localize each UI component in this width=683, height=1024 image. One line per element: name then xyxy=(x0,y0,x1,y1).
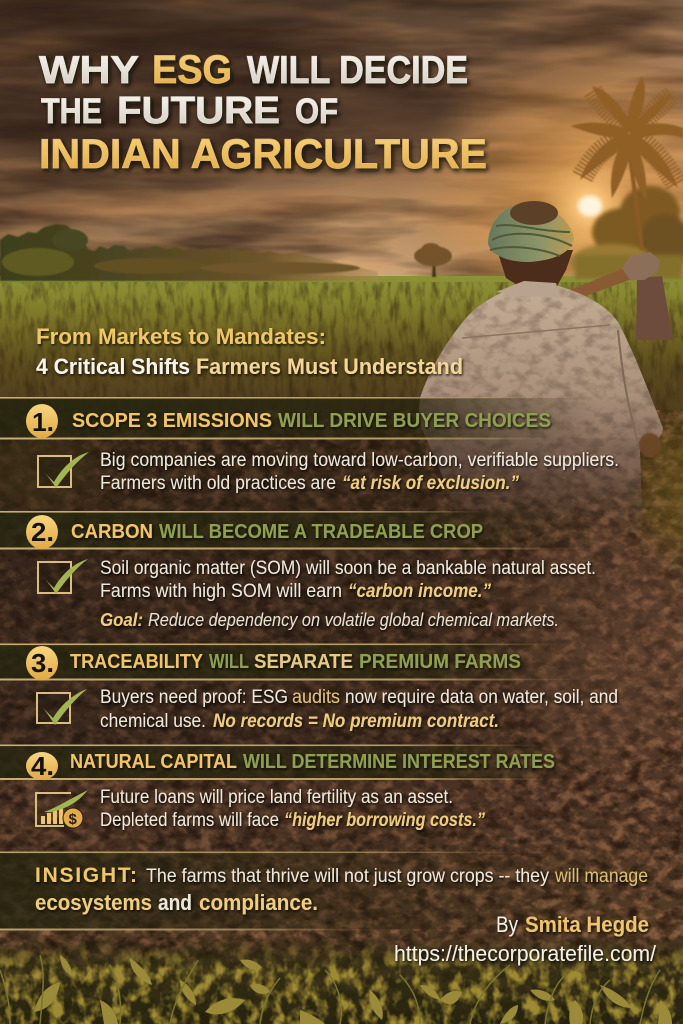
body text 4 xyxy=(100,787,485,831)
body text 1: Farmers with old practices are xyxy=(100,473,336,494)
title: THE xyxy=(41,92,102,131)
hoe handle xyxy=(560,264,640,304)
badge 3: 3. xyxy=(31,648,54,678)
heading 1: WILL DRIVE BUYER CHOICES xyxy=(278,409,551,432)
body text 4: Future loans will price land fertility as an asset. xyxy=(100,787,453,808)
icon: finance chart with leaf and coin: $ xyxy=(68,811,78,828)
title: OF xyxy=(295,92,338,131)
section 4 background xyxy=(0,780,683,852)
section 1 panel xyxy=(0,397,683,512)
heading 3: TRACEABILITY xyxy=(70,650,203,673)
palm tree xyxy=(570,76,683,250)
insight text: compliance. xyxy=(199,890,318,915)
section 3 panel xyxy=(0,644,683,745)
turban xyxy=(488,203,574,262)
title: ESG xyxy=(152,48,232,92)
body text 1 xyxy=(100,450,619,494)
insight text: The farms that thrive will not just grow crops -- they xyxy=(146,866,549,887)
sun glow xyxy=(578,196,602,216)
lone tree xyxy=(414,243,452,277)
icon: checkbox 2 xyxy=(38,559,88,594)
heading 3: SEPARATE xyxy=(254,650,353,673)
shirt texture xyxy=(427,287,661,542)
body text 3 xyxy=(100,687,618,732)
badge 4: 4. xyxy=(31,751,54,781)
heading 1 xyxy=(72,409,551,432)
title: INDIAN AGRICULTURE xyxy=(39,130,487,177)
hand on hoe xyxy=(622,252,660,280)
subheading: Farmers Must Understand xyxy=(196,354,463,379)
heading 4: NATURAL CAPITAL xyxy=(70,750,237,773)
byline and url: https://thecorporatefile.com/ xyxy=(394,941,657,966)
insight panel xyxy=(0,852,683,930)
body text 3: chemical use. xyxy=(100,711,206,732)
body text 2: Soil organic matter (SOM) will soon be a bankable natural asset. xyxy=(100,558,596,579)
badge 3 xyxy=(26,646,58,680)
section 2 background xyxy=(0,549,683,644)
body text 3: audits xyxy=(292,687,340,708)
body text 2: Farms with high SOM will earn xyxy=(100,581,342,602)
body text 3: Buyers need proof: ESG xyxy=(100,687,288,708)
section 3 background xyxy=(0,680,683,745)
body text 2: “carbon income.” xyxy=(348,581,491,602)
background: field and soil xyxy=(0,276,683,1024)
title: FUTURE xyxy=(117,90,280,132)
badge 4 xyxy=(26,751,58,781)
icon: checkbox 1 xyxy=(38,452,89,488)
insight text: INSIGHT: xyxy=(35,864,137,887)
subheading: 4 Critical Shifts xyxy=(36,354,190,379)
section 1 background xyxy=(0,438,683,512)
body text 3: No records = No premium contract. xyxy=(213,711,499,732)
hoe blade xyxy=(636,276,673,340)
heading 1: SCOPE 3 EMISSIONS xyxy=(72,409,272,432)
heading 2: CARBON xyxy=(71,520,153,543)
heading 4: WILL DETERMINE INTEREST RATES xyxy=(243,750,555,773)
section 4 header band xyxy=(0,745,683,779)
insight text: ecosystems xyxy=(35,890,152,915)
insight text: will manage xyxy=(554,866,648,887)
heading 2: WILL BECOME A TRADEABLE CROP xyxy=(159,520,483,543)
byline and url: Smita Hegde xyxy=(525,912,649,937)
hand at side xyxy=(639,433,661,457)
section 1 header band xyxy=(0,398,683,438)
background: sunset sky xyxy=(0,0,683,285)
insight text: and xyxy=(158,890,192,915)
body text 2 xyxy=(100,558,596,630)
heading 3: WILL xyxy=(209,650,249,673)
insight background xyxy=(0,853,683,929)
farmer with hoe xyxy=(410,201,673,550)
title xyxy=(39,48,487,177)
body text 1: “at risk of exclusion.” xyxy=(342,473,519,494)
turban crown xyxy=(510,201,558,225)
badge 1 xyxy=(26,404,58,438)
tree line on the horizon xyxy=(0,224,378,281)
byline and url xyxy=(394,912,657,966)
badge 1: 1. xyxy=(32,407,54,437)
goal line: Goal: xyxy=(100,610,143,630)
body text 4: “higher borrowing costs.” xyxy=(284,810,485,831)
body text 4: Depleted farms will face xyxy=(100,810,279,831)
heading 3 xyxy=(70,650,521,673)
section 2 panel xyxy=(0,511,683,644)
icon: checkbox 3 xyxy=(37,689,87,725)
goal line: Reduce dependency on volatile global chemical markets. xyxy=(148,610,559,630)
neck xyxy=(497,250,573,288)
section 3 header band xyxy=(0,644,683,679)
badge 2: 2. xyxy=(31,517,54,547)
foreground foliage xyxy=(0,935,683,1024)
heading 4 xyxy=(70,750,555,773)
subheading xyxy=(36,324,463,379)
subheading: From Markets to Mandates: xyxy=(36,324,326,349)
section 2 header band xyxy=(0,512,683,548)
body text 3: now require data on water, soil, and xyxy=(345,687,618,708)
body text 1: Big companies are moving toward low-carbon, verifiable suppliers. xyxy=(100,450,619,471)
heading 3: PREMIUM FARMS xyxy=(359,650,521,673)
collar xyxy=(496,281,560,298)
icon: finance chart with leaf and coin xyxy=(36,790,88,828)
section 4 panel xyxy=(0,744,683,852)
title: WILL DECIDE xyxy=(247,49,468,92)
trees behind farmer xyxy=(570,186,683,280)
shirt xyxy=(418,284,663,548)
turban folds xyxy=(490,225,572,256)
badge 2 xyxy=(26,515,58,549)
byline and url: By xyxy=(496,912,518,937)
insight text xyxy=(35,864,648,915)
title: WHY xyxy=(39,49,139,92)
